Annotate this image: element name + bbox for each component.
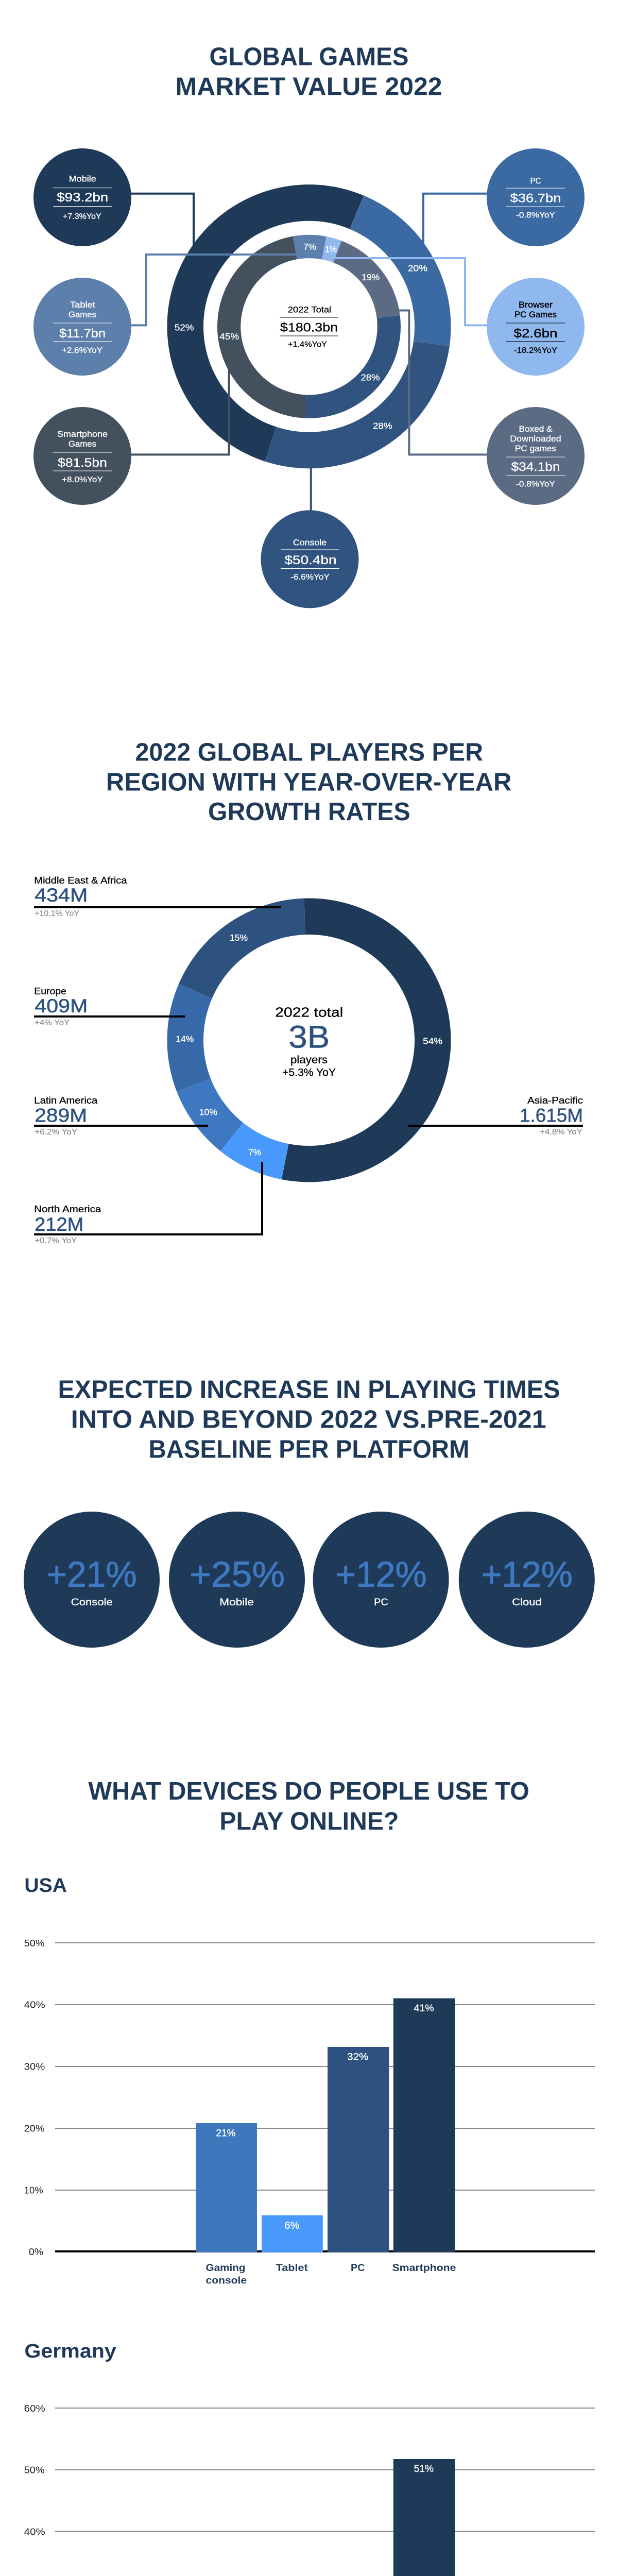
donut centre: 3B players: +5.3% YoY (282, 1066, 336, 1079)
callout: boxed and downloaded pc games: $34.1bn (511, 460, 560, 474)
callout: tablet games (33, 278, 131, 376)
stat circle: cloud: Cloud (512, 1597, 542, 1608)
bar chart: germany: 51% (414, 2464, 434, 2475)
stat circle: console (24, 1512, 160, 1648)
donut percentage labels (175, 242, 427, 431)
bar chart: germany: 60% (24, 2403, 45, 2414)
donut centre: 3B players: 2022 total (275, 1005, 343, 1020)
callout: console (261, 510, 358, 608)
donut percentage labels: 7% (303, 242, 316, 252)
callout: browser pc games: PC Games (514, 310, 557, 319)
region: middle east and africa (34, 875, 127, 918)
panel: global players per region (34, 738, 583, 1245)
regional donut percentage labels: 54% (423, 1036, 442, 1046)
bar chart: usa: 32% (347, 2052, 368, 2063)
stat circle: pc (313, 1512, 449, 1648)
region: asia-pacific (520, 1095, 583, 1137)
callout: boxed and downloaded pc games: Boxed & (519, 425, 552, 434)
callout: pc (487, 148, 585, 246)
bar chart: usa: 50% (24, 1938, 45, 1948)
bar chart: usa (24, 1938, 595, 2286)
title: global games market value 2022 (176, 42, 442, 100)
chart: regional donut (135, 866, 483, 1214)
chart: outer donut (147, 164, 471, 488)
callout: smartphone games: +8.0%YoY (62, 476, 103, 484)
title: expected increase in playing times: INTO AND BEYOND 2022 VS.PRE-2021 (71, 1405, 546, 1434)
region: north america (34, 1204, 101, 1245)
bar chart: usa: 10% (24, 2185, 43, 2196)
heading: germany: Germany (24, 2341, 116, 2362)
callout: tablet games: Games (68, 310, 96, 319)
chart: inner donut (206, 223, 412, 430)
callout: smartphone games: Smartphone (57, 430, 108, 439)
stat circle: cloud: +12% (481, 1554, 573, 1595)
bar chart: usa: Gaming (206, 2263, 245, 2274)
callout: boxed and downloaded pc games: PC games (515, 444, 556, 453)
bar chart: usa: Tablet (276, 2263, 308, 2274)
region: north america: +0.7% YoY (35, 1236, 77, 1245)
title: expected increase in playing times: BASELINE PER PLATFORM (148, 1435, 470, 1464)
bar chart: usa: 30% (24, 2062, 45, 2072)
title: global games market value 2022: MARKET VALUE 2022 (176, 72, 442, 100)
donut centre total: +1.4%YoY (288, 340, 327, 349)
bar chart: germany: 50% (24, 2465, 45, 2476)
region: latin america: 289M (35, 1105, 87, 1126)
region: north america: North America (34, 1204, 101, 1214)
title: what devices do people use: WHAT DEVICES DO PEOPLE USE TO (88, 1777, 529, 1805)
callout: browser pc games: $2.6bn (514, 327, 557, 341)
callout: console: Console (293, 538, 327, 547)
callout: smartphone games (33, 407, 131, 505)
callout: console: -6.6%YoY (290, 573, 330, 582)
callout: mobile (33, 148, 131, 246)
region: europe (34, 986, 88, 1027)
panel: expected increase in playing times (24, 1376, 595, 1648)
regional donut percentage labels: 14% (176, 1034, 194, 1044)
region: latin america: Latin America (34, 1095, 98, 1106)
bar chart: usa: 40% (24, 2000, 45, 2010)
stat circle: mobile: Mobile (219, 1597, 254, 1608)
callout: boxed and downloaded pc games: -0.8%YoY (516, 480, 555, 488)
connector lines (131, 194, 487, 511)
bar chart: germany: 40% (24, 2527, 45, 2537)
title: what devices do people use (88, 1777, 529, 1835)
regional donut percentage labels (176, 933, 442, 1157)
donut centre total (280, 306, 338, 349)
region: europe: 409M (35, 995, 88, 1016)
callout: mobile: +7.3%YoY (63, 212, 101, 221)
stat circle: pc: +12% (335, 1554, 427, 1595)
stat circle: pc: PC (374, 1597, 388, 1608)
region: asia-pacific: 1.615M (520, 1105, 583, 1126)
bar chart: usa: PC (351, 2263, 365, 2274)
donut percentage labels: 52% (175, 322, 194, 332)
bar chart: usa: console (206, 2275, 247, 2286)
callout: pc: PC (530, 177, 541, 186)
callout: boxed and downloaded pc games: Downloaded (510, 434, 561, 444)
donut percentage labels: 45% (219, 331, 239, 342)
stat circle: console: +21% (46, 1554, 137, 1595)
region: latin america (34, 1095, 98, 1137)
donut percentage labels: 28% (373, 421, 392, 431)
region: europe: Europe (34, 986, 66, 996)
panel: devices used to play online (24, 1777, 595, 2576)
bar chart: usa: 6% (284, 2221, 300, 2231)
region: middle east and africa: +10.1% YoY (35, 909, 79, 918)
title: 2022 global players per region (106, 738, 511, 826)
callout: smartphone games: $81.5bn (58, 456, 107, 470)
regional donut percentage labels: 7% (248, 1147, 261, 1157)
stat circle: console: Console (71, 1597, 113, 1608)
callout: boxed and downloaded pc games (487, 407, 585, 505)
callout: tablet games: $11.7bn (59, 327, 106, 341)
donut percentage labels: 19% (362, 272, 380, 282)
callout: browser pc games (487, 278, 585, 376)
regional donut percentage labels: 10% (199, 1107, 217, 1117)
callout: tablet games: Tablet (70, 300, 95, 310)
regional donut percentage labels: 15% (230, 933, 248, 943)
title: 2022 global players per region: 2022 GLOBAL PLAYERS PER (135, 738, 483, 766)
callout: pc: $36.7bn (510, 192, 561, 206)
bar chart: usa: 21% (216, 2128, 236, 2139)
donut percentage labels: 20% (408, 263, 427, 273)
stat circle: cloud (459, 1512, 595, 1648)
stat circle: mobile: +25% (190, 1554, 285, 1595)
bar chart: usa: 0% (29, 2247, 43, 2257)
title: global games market value 2022: GLOBAL GAMES (209, 42, 409, 71)
callout: mobile: $93.2bn (57, 191, 108, 205)
callout: browser pc games: Browser (519, 300, 553, 310)
callout: mobile: Mobile (69, 175, 96, 184)
region: middle east and africa: Middle East & Africa (34, 875, 127, 886)
region: latin america: +6.2% YoY (35, 1128, 77, 1137)
bar chart: usa: 20% (24, 2124, 45, 2134)
panel: global games market value (33, 42, 585, 608)
donut centre: 3B players (275, 1005, 343, 1079)
title: 2022 global players per region: REGION WITH YEAR-OVER-YEAR (106, 768, 511, 796)
title: 2022 global players per region: GROWTH RATES (208, 798, 410, 826)
donut centre: 3B players: players (290, 1054, 328, 1066)
title: expected increase in playing times (58, 1376, 560, 1464)
callout: console: $50.4bn (284, 553, 337, 567)
donut centre: 3B players: 3B (288, 1019, 330, 1054)
title: what devices do people use: PLAY ONLINE? (219, 1807, 399, 1835)
region: north america: 212M (35, 1214, 83, 1235)
heading: usa: USA (24, 1875, 67, 1896)
region: europe: +4% YoY (35, 1019, 70, 1027)
bar chart: germany (24, 2403, 595, 2576)
bar chart: usa: Smartphone (392, 2263, 456, 2274)
donut percentage labels: 1% (325, 244, 337, 254)
stat circle: mobile (169, 1512, 305, 1648)
callout: pc: -0.8%YoY (516, 211, 555, 219)
title: expected increase in playing times: EXPECTED INCREASE IN PLAYING TIMES (58, 1376, 560, 1403)
callout: tablet games: +2.6%YoY (62, 346, 102, 355)
callout: smartphone games: Games (68, 439, 96, 449)
callout: browser pc games: -18.2%YoY (514, 346, 557, 355)
donut centre total: 2022 Total (288, 306, 331, 315)
donut centre total: $180.3bn (280, 320, 338, 334)
region: asia-pacific: Asia-Pacific (527, 1095, 583, 1106)
leader lines (34, 907, 583, 1234)
region: middle east and africa: 434M (35, 885, 88, 906)
region: asia-pacific: +4.8% YoY (540, 1128, 582, 1137)
donut percentage labels: 28% (361, 372, 380, 383)
bar chart: usa: 41% (414, 2003, 434, 2014)
